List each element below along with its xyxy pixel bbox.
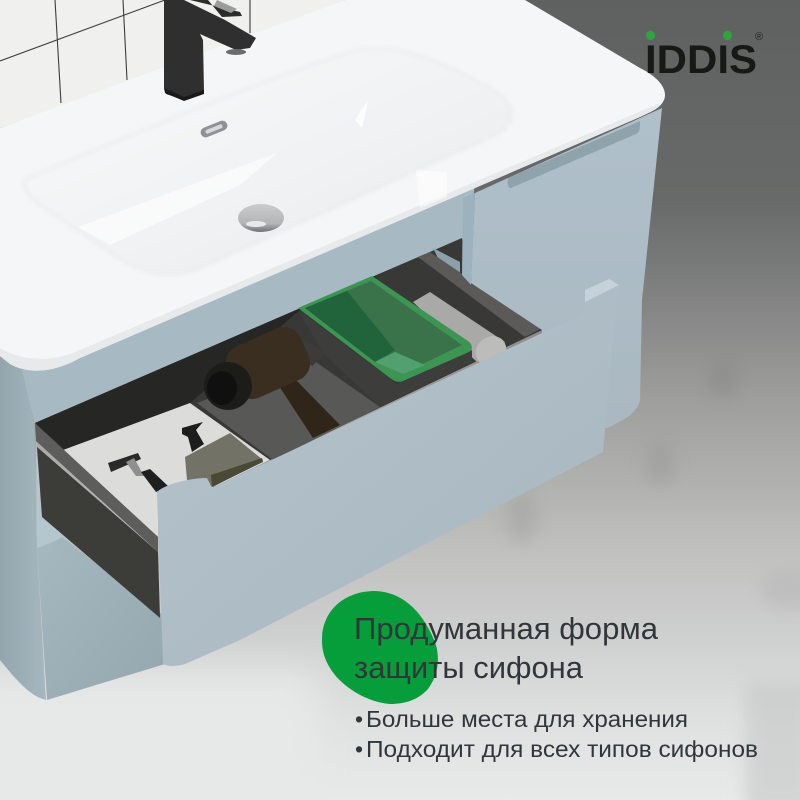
bottle	[182, 422, 263, 487]
rolled towel	[413, 292, 512, 372]
bullet list: •	[355, 736, 363, 762]
heading: Продуманная форма	[354, 612, 658, 646]
cabinet: left side panel	[0, 350, 46, 700]
registered mark: ®	[755, 31, 763, 43]
tiled wall	[0, 0, 345, 128]
tray wall	[298, 310, 472, 407]
back wall	[35, 262, 407, 452]
bullet list: Больше места для хранения	[366, 706, 688, 732]
black faucet	[164, 0, 256, 101]
drawer floor	[197, 360, 380, 460]
cabinet: lower drawer	[37, 537, 165, 700]
hair dryer	[204, 321, 340, 438]
drain	[238, 204, 284, 232]
razor	[108, 453, 168, 492]
drawer slider	[433, 248, 460, 273]
door post	[462, 193, 475, 285]
cabinet: band under counter	[22, 180, 475, 425]
heading	[354, 612, 658, 685]
logo green dots	[646, 31, 732, 40]
heading: защиты сифона	[354, 651, 583, 685]
cabinet: right door	[462, 108, 662, 428]
towel	[63, 403, 270, 537]
open drawer front panel	[157, 279, 619, 666]
right side rim	[418, 252, 542, 337]
IDDIS logo: IDDIS	[645, 38, 757, 82]
open drawer interior	[35, 238, 542, 540]
overflow	[199, 119, 229, 139]
green blob accent	[322, 591, 438, 704]
open drawer left wall	[35, 423, 160, 618]
green tray	[298, 276, 472, 382]
basin reflections	[78, 100, 447, 245]
cabinet: gap behind open drawer	[36, 440, 70, 550]
door handle groove	[508, 121, 640, 188]
basin bowl	[24, 48, 511, 274]
bullet list: Подходит для всех типов сифонов	[366, 736, 758, 762]
bullet list	[355, 706, 758, 762]
washbasin counter	[0, 0, 665, 371]
bullet list: •	[355, 706, 363, 732]
